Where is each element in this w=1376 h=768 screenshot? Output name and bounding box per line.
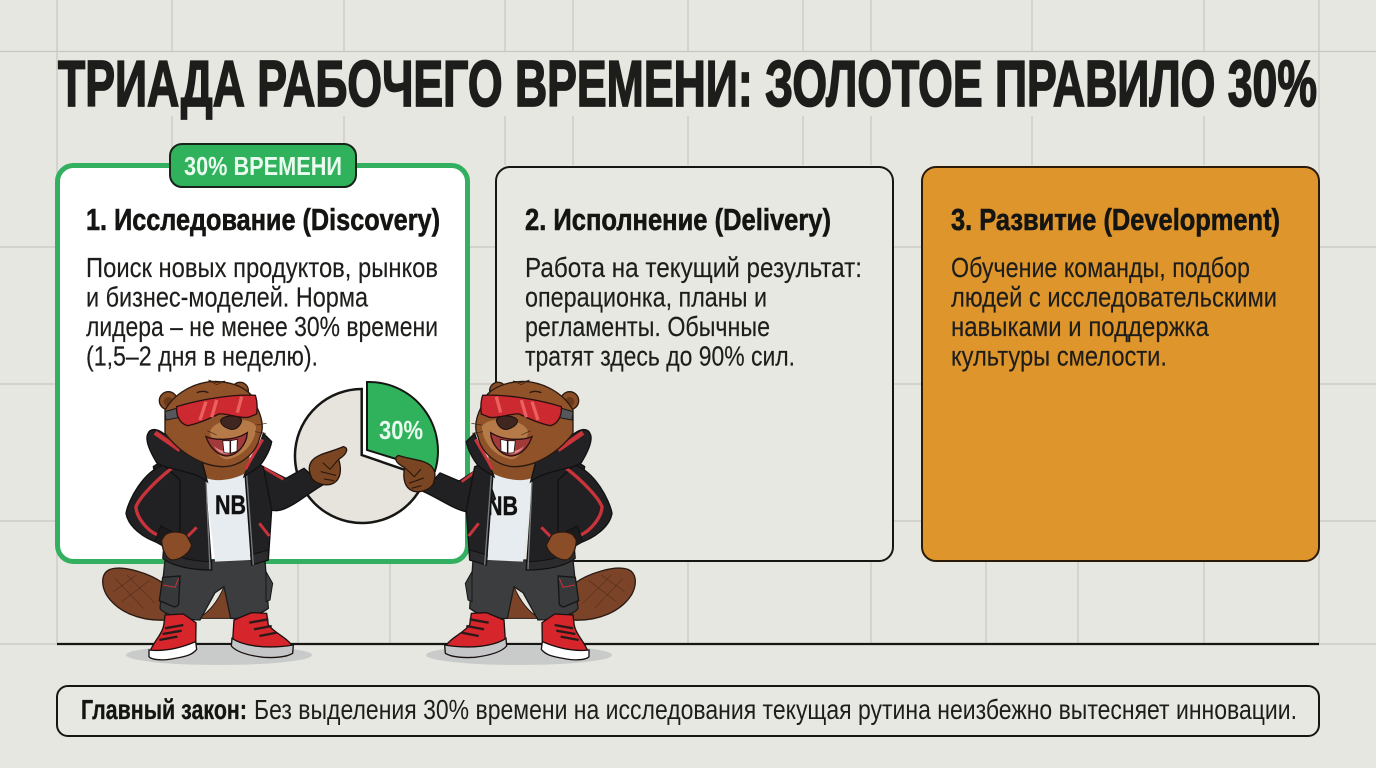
badge: 30% of time: 30% ВРЕМЕНИ	[184, 151, 342, 181]
callout: main law	[57, 686, 1319, 736]
panel: development	[922, 167, 1319, 561]
text block: discovery description: лидера – не менее 30% времени	[86, 311, 438, 342]
text block: discovery description: и бизнес-моделей. Норма	[86, 282, 369, 312]
chart: pie 30%	[295, 382, 438, 523]
panel: discovery	[58, 144, 468, 562]
text block: delivery description: тратят здесь до 90% сил.	[525, 340, 795, 372]
text block: development description	[951, 252, 1277, 372]
text block: development description: людей с исследовательскими	[951, 282, 1277, 312]
heading: discovery: 1. Исследование (Discovery)	[86, 202, 440, 237]
icon: beaver mascot right	[395, 380, 635, 665]
heading: development: 3. Развитие (Development)	[951, 202, 1280, 237]
text block: delivery description: регламенты. Обычные	[525, 311, 770, 342]
icon: beaver mascot left: NB	[215, 490, 246, 520]
text block: development description: навыками и поддержка	[951, 311, 1210, 342]
icon: beaver mascot right: NB	[487, 491, 518, 521]
text block: development description: культуры смелости.	[951, 340, 1167, 372]
badge: 30% of time	[170, 144, 356, 187]
text block: development description: Обучение команды, подбор	[951, 252, 1250, 283]
text block: discovery description: Поиск новых продуктов, рынков	[86, 252, 438, 283]
icon: beaver mascot left	[103, 380, 347, 665]
text block: discovery description: (1,5–2 дня в неделю).	[86, 340, 318, 372]
callout: main law: Главный закон:	[81, 694, 247, 725]
chart: pie 30%: 30%	[379, 415, 423, 445]
panel: delivery	[496, 167, 893, 561]
text block: delivery description: Работа на текущий результат:	[525, 252, 862, 283]
text block: delivery description: операционка, планы и	[525, 282, 767, 312]
text block: delivery description	[525, 252, 862, 372]
text block: discovery description	[86, 252, 438, 372]
heading: delivery: 2. Исполнение (Delivery)	[525, 202, 831, 237]
